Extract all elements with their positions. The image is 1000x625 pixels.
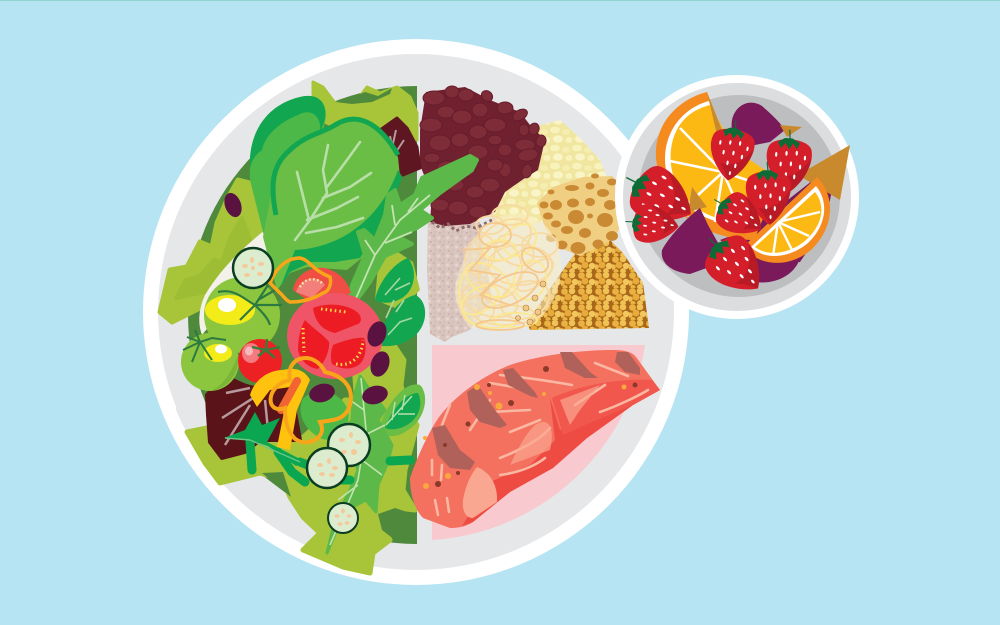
salmon body bbox=[410, 350, 660, 528]
leaf: dark rocket bbox=[224, 412, 410, 482]
lettuce: right lower bbox=[352, 345, 408, 470]
quinoa fringe bbox=[516, 281, 546, 325]
leaf: green behind pepper bbox=[301, 391, 349, 440]
strawberry: top centre bbox=[705, 117, 759, 184]
lettuce: top bbox=[313, 82, 417, 140]
white strands bbox=[199, 230, 270, 335]
salmon right fillet bbox=[552, 380, 660, 435]
salmon spice specks bbox=[423, 384, 626, 489]
beet: lower left bbox=[662, 208, 722, 274]
base patch lower bbox=[262, 472, 416, 544]
leaf: spinach lower right bbox=[378, 384, 425, 436]
grain: golden quinoa bbox=[527, 230, 649, 330]
leaf: spinach upper right bbox=[375, 250, 425, 346]
strawberry: bottom bbox=[691, 220, 775, 306]
orange slice: large bbox=[656, 92, 775, 240]
pink backing bbox=[432, 345, 645, 540]
yellow pepper strip bbox=[250, 369, 310, 450]
panel: salmon bbox=[410, 345, 660, 540]
panel: salad bbox=[160, 82, 477, 573]
bowl rims bbox=[615, 75, 859, 319]
beet: lower bbox=[744, 255, 800, 283]
green tomato: lower bbox=[181, 330, 239, 391]
dark green base bbox=[188, 86, 417, 544]
strawberry: lower left bbox=[623, 202, 681, 247]
grain: kidney beans bbox=[420, 86, 547, 231]
leaf: rocket lower bbox=[327, 376, 392, 553]
grain: grey-pink rice bbox=[427, 214, 492, 342]
kidney beans: on tomato bbox=[307, 319, 393, 407]
salmon flesh streaks bbox=[432, 363, 648, 515]
radicchio: top bbox=[380, 118, 420, 175]
cucumber: right bbox=[328, 424, 370, 466]
cucumber: bottom bbox=[328, 503, 358, 533]
green tomato: upper bbox=[204, 277, 282, 353]
panel: grains section bbox=[420, 86, 649, 342]
main plate bbox=[143, 39, 689, 585]
brown triangle: small left bbox=[688, 187, 707, 212]
pepper ring: upper bbox=[270, 258, 331, 302]
lettuce: upper left inner tone bbox=[176, 218, 250, 298]
strawberry: centre small bbox=[703, 182, 772, 247]
lettuce: bottom bbox=[187, 400, 417, 573]
orange slice: lower right bbox=[743, 177, 830, 263]
strawberry: large left bbox=[613, 154, 704, 238]
brown triangle: small bbox=[780, 125, 802, 137]
strawberry: right bbox=[764, 128, 814, 194]
salmon pale panel bbox=[510, 385, 600, 465]
beet: top bbox=[732, 103, 785, 147]
grain: noodle tangle bbox=[455, 205, 561, 330]
dark base patch top bbox=[335, 88, 392, 104]
grey plate showing through lower-left bbox=[176, 330, 322, 552]
purple under-wedge bbox=[720, 177, 832, 265]
kidney bean: upper left bbox=[221, 191, 245, 219]
cucumber: left bbox=[307, 448, 347, 488]
salmon dark underside bbox=[462, 390, 660, 526]
orange-red pepper strip bbox=[281, 381, 297, 410]
brown triangle: top of orange bbox=[707, 92, 722, 148]
tomato wedge bbox=[293, 268, 351, 302]
grain: brown lentils bbox=[537, 174, 622, 256]
salmon pepper specks bbox=[435, 366, 638, 487]
salmon cut face bbox=[463, 467, 497, 518]
leaf: main romaine bbox=[263, 117, 402, 290]
grain: cream couscous bbox=[488, 120, 612, 225]
leaf: rocket upper bbox=[347, 156, 477, 313]
cucumber: upper bbox=[233, 248, 273, 288]
panel: fruit bowl bbox=[613, 75, 859, 319]
strawberry: middle bbox=[746, 162, 791, 225]
large tomato bbox=[287, 293, 383, 379]
cherry tomato bbox=[238, 339, 282, 383]
radicchio: lower bbox=[207, 375, 300, 458]
lettuce: upper left bbox=[160, 180, 266, 322]
pepper ring: large bbox=[271, 358, 351, 442]
salmon grill marks bbox=[432, 352, 640, 470]
brown triangle: large bbox=[798, 145, 850, 200]
leaf: back romaine bbox=[250, 96, 326, 240]
